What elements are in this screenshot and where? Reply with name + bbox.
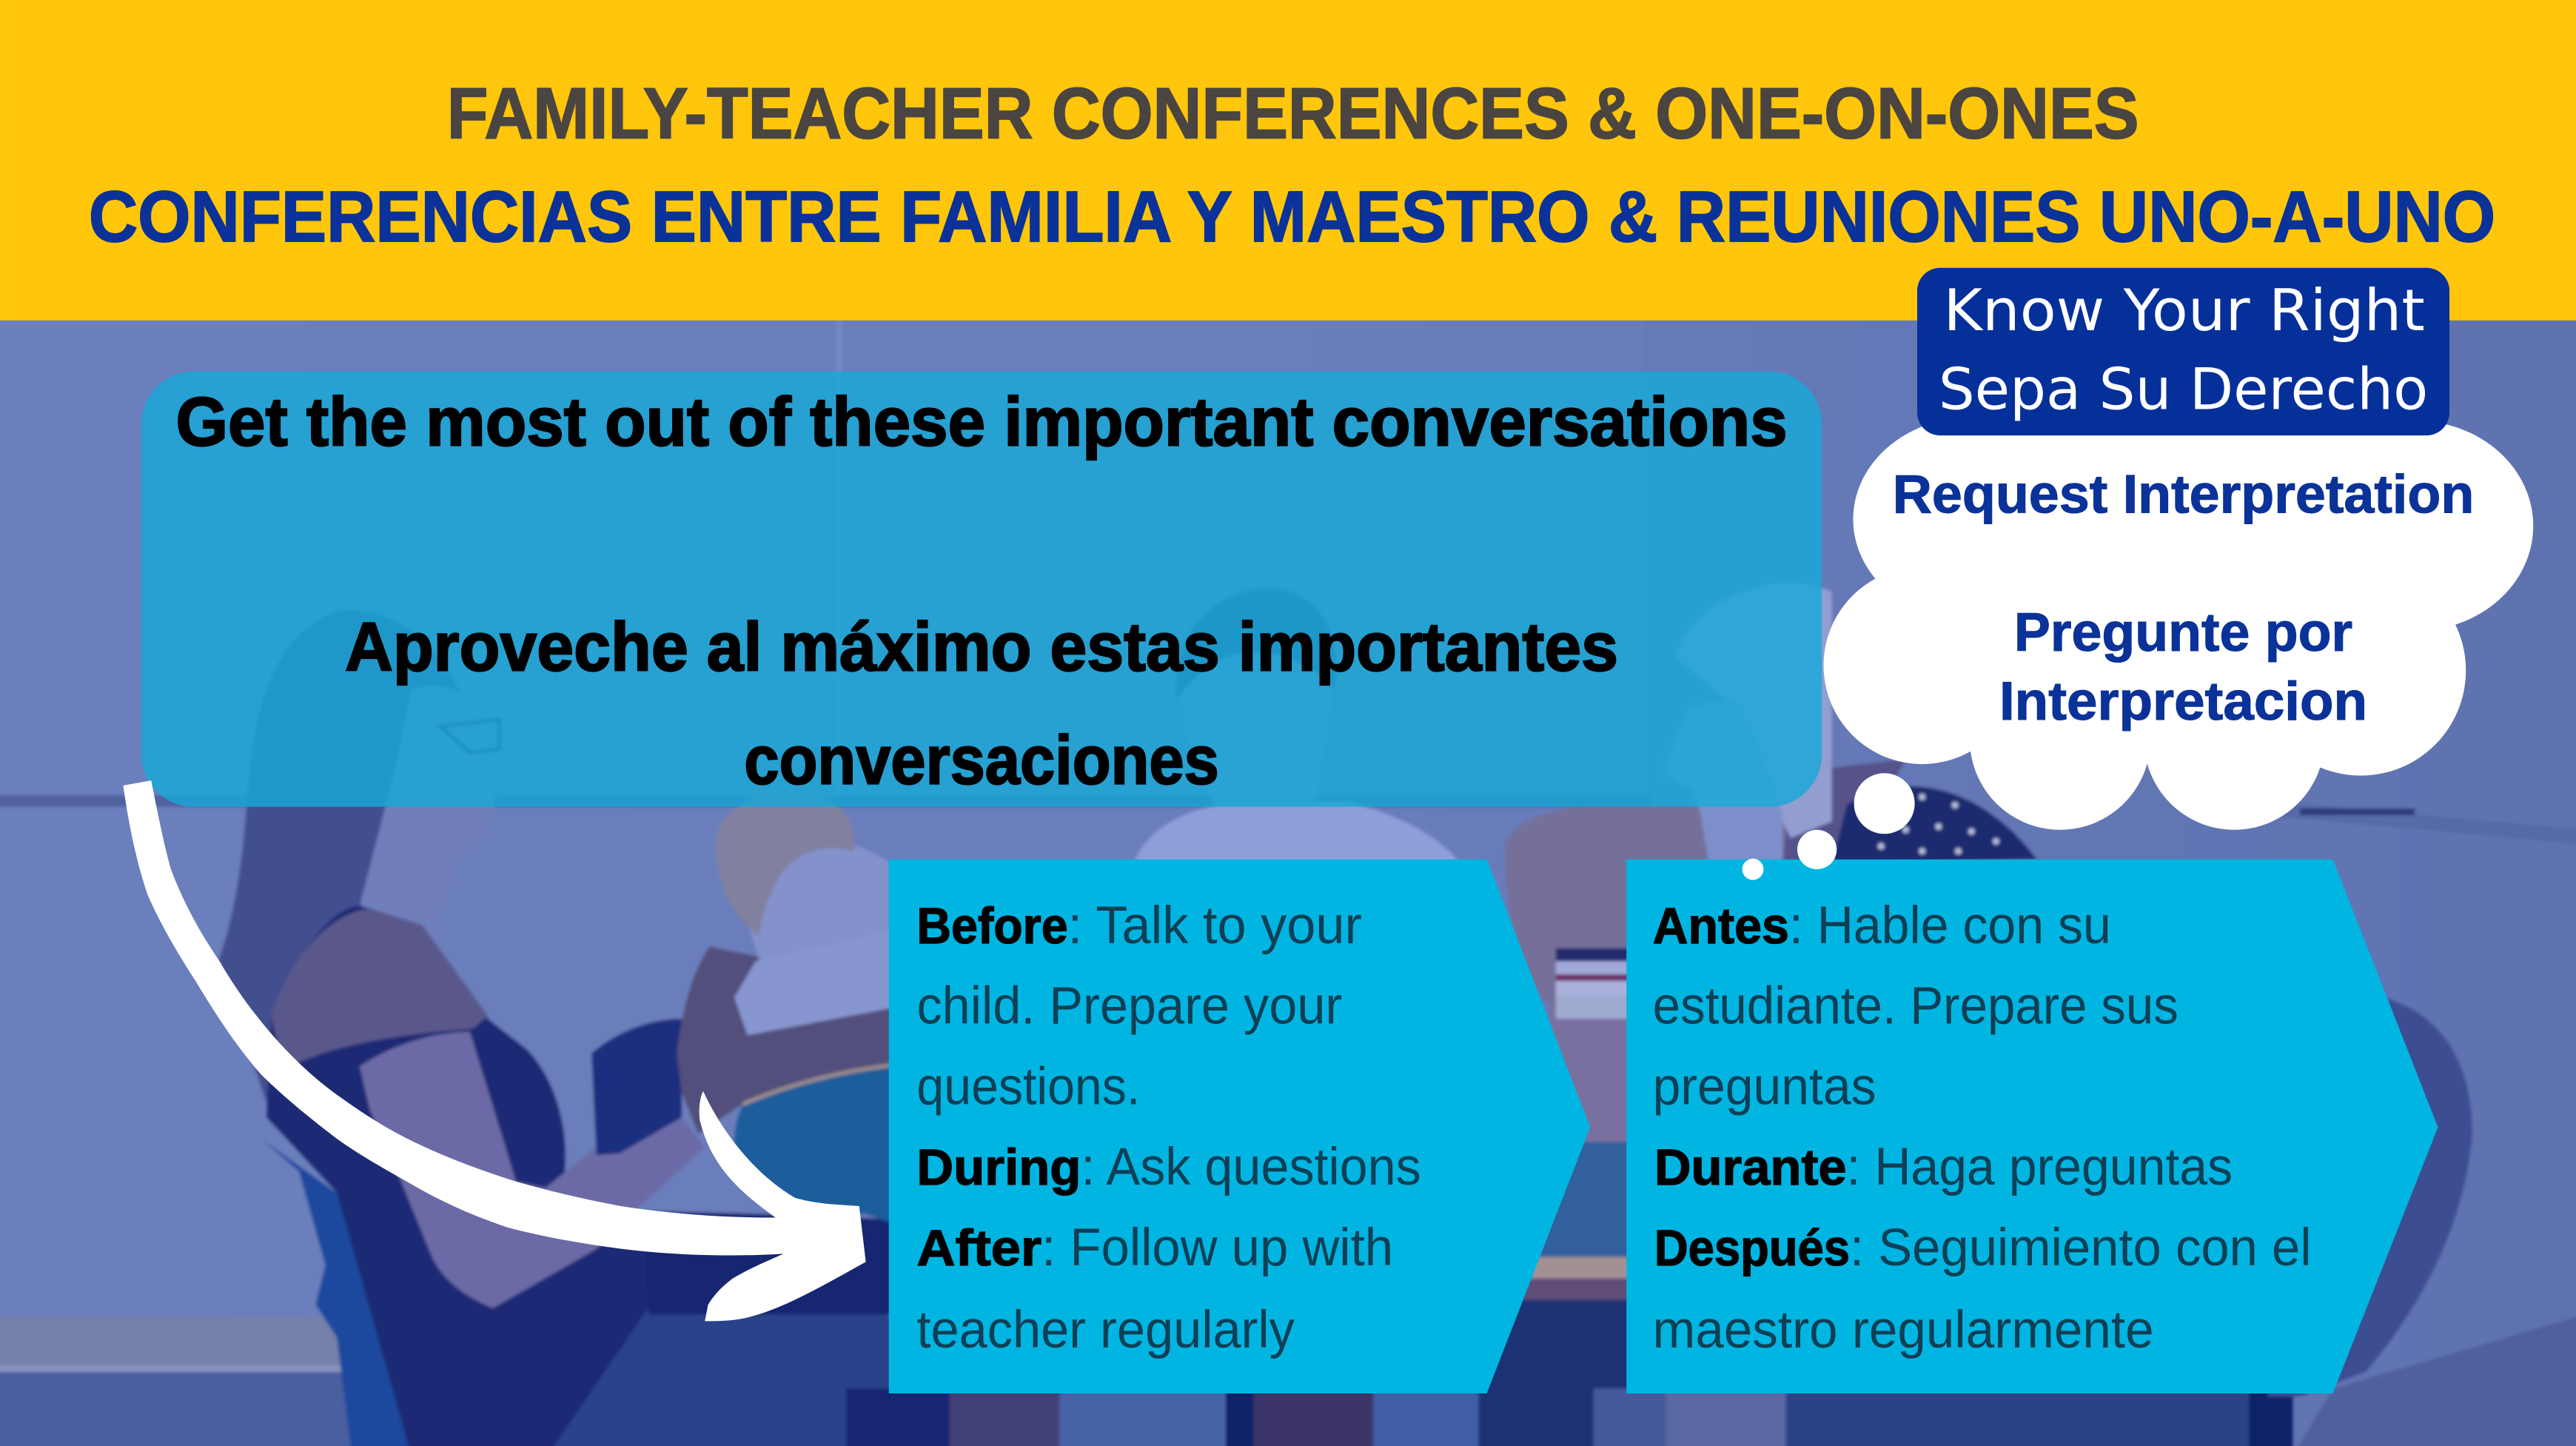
legs and floor along the bottom edge xyxy=(846,1388,2293,1446)
despues line xyxy=(1654,1219,2312,1277)
blue chair under the woman xyxy=(261,1139,411,1446)
left woman's arm xyxy=(360,1032,705,1308)
title in English: FAMILY-TEACHER CONFERENCES & ONE-ON-ONES xyxy=(447,73,2139,153)
antes line: Antes xyxy=(1653,897,1789,954)
panel: English arrow box xyxy=(889,860,1590,1393)
headline in Spanish, second line: conversaciones xyxy=(744,722,1219,799)
table xyxy=(734,1004,1643,1446)
chair on the right xyxy=(2267,996,2472,1396)
antes line 3: preguntas xyxy=(1653,1057,1876,1116)
badge text in English: Know Your Right xyxy=(1944,278,2425,344)
headline in English: Get the most out of these important conversations xyxy=(176,383,1788,460)
woman on the right xyxy=(1663,583,2037,871)
antes line: : Hable con su xyxy=(1789,897,2111,955)
during line: : Ask questions xyxy=(1081,1138,1421,1196)
durante line xyxy=(1654,1138,2233,1196)
after line 2: teacher regularly xyxy=(916,1301,1295,1359)
woman on the left xyxy=(218,610,705,1446)
despues line: Después xyxy=(1654,1219,1850,1276)
after line: After xyxy=(916,1219,1042,1276)
panel: translucent headline box xyxy=(141,372,1822,807)
books on the table xyxy=(1556,948,1634,1019)
arrow: curved white arrow xyxy=(124,780,866,1321)
cloud text: Interpretacion: Interpretacion xyxy=(1999,671,2367,732)
background photo: family-teacher meeting with blue duotone xyxy=(0,312,2576,1446)
thought cloud xyxy=(1823,418,2533,830)
antes line 2: estudiante. Prepare sus xyxy=(1653,977,2178,1036)
despues line: : Seguimiento con el xyxy=(1850,1219,2312,1277)
jeans xyxy=(549,1308,961,1446)
before line: Before xyxy=(916,897,1068,954)
before line: : Talk to your xyxy=(1068,897,1362,955)
badge text in Spanish: Sepa Su Derecho xyxy=(1939,357,2428,424)
thought bubbles xyxy=(1743,773,1915,880)
wicker chair xyxy=(1505,803,1799,1011)
badge: know your right xyxy=(1917,268,2449,435)
title in Spanish: CONFERENCIAS ENTRE FAMILIA Y MAESTRO & REUNIONES UNO-A-UNO xyxy=(89,176,2495,257)
despues line 2: maestro regularmente xyxy=(1653,1301,2154,1359)
cloud text: Pregunte por: Pregunte por xyxy=(2014,602,2352,663)
header band xyxy=(0,0,2576,321)
before line 3: questions. xyxy=(916,1057,1140,1116)
during line xyxy=(916,1138,1421,1196)
panel: Spanish arrow box xyxy=(1626,860,2438,1393)
after line: : Follow up with xyxy=(1042,1219,1393,1277)
durante line: : Haga preguntas xyxy=(1847,1138,2233,1196)
lap shadow xyxy=(644,1211,896,1314)
durante line: Durante xyxy=(1654,1139,1847,1196)
antes line xyxy=(1653,897,2111,955)
cloud text: Request Interpretation: Request Interpretation xyxy=(1893,463,2474,524)
before line 2: child. Prepare your xyxy=(916,977,1342,1036)
headline in Spanish: Aproveche al máximo estas importantes xyxy=(345,608,1618,685)
man in the centre xyxy=(1133,588,1466,871)
during line: During xyxy=(916,1139,1081,1196)
before line xyxy=(916,897,1362,955)
boy at the table xyxy=(591,791,896,1155)
